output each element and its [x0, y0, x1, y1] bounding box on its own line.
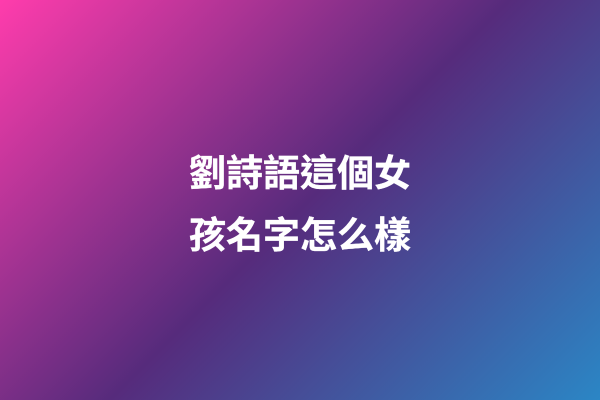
- title: 劉詩語這個女: [189, 153, 411, 194]
- title: [189, 153, 411, 256]
- title: 孩名字怎么樣: [189, 215, 411, 256]
